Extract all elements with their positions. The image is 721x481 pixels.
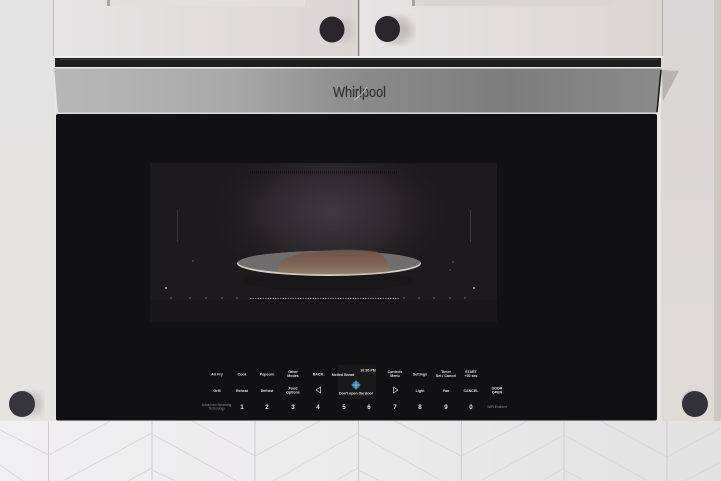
top row buttons: Other [288,370,298,374]
top row buttons: Menu [390,374,400,378]
number row: 3 [291,404,295,411]
side knob: right [682,391,708,417]
top row buttons: +30 sec [464,374,478,378]
middle row buttons: Don't open the door [339,392,374,396]
top row buttons: Settings [413,372,427,376]
middle row buttons: Fan [443,389,449,393]
middle row buttons: OPEN [492,390,502,394]
upper cabinet doors [53,0,663,58]
display screen [338,365,376,399]
top row buttons: 10:30 PM [360,368,376,372]
feature label: steaming: Technology [208,406,225,410]
plate [237,251,421,291]
wall panel: left [0,0,54,423]
oven cavity window [150,163,497,300]
top row buttons: Melted Bread [332,373,354,377]
middle row buttons: Defrost [261,389,274,393]
middle row buttons: DOOR [492,386,503,390]
feature label: wifi: WiFi Enabled [487,405,507,409]
number row: 5 [342,404,346,411]
feature label: steaming [202,403,231,410]
logo: Whirlpool: Whirlpool [333,84,386,101]
number row: 9 [444,404,448,411]
cabinet knob: left [320,16,344,42]
microwave vent gap [55,58,661,69]
left arrow [316,387,320,393]
middle row buttons: Reheat [236,389,249,393]
number row: 6 [367,404,371,411]
number row: 0 [469,404,473,411]
middle row buttons: Light [416,389,425,393]
food on plate [278,250,390,274]
backsplash tiles [0,421,721,481]
top row buttons: Air Fry [211,372,223,376]
number row: 2 [265,404,269,411]
steel trim shadow [662,70,679,101]
number row [240,404,473,411]
top row buttons [211,368,478,378]
number row: 8 [418,404,422,411]
number row: 4 [316,404,320,411]
middle row buttons [213,386,503,396]
rack dots and rails [165,210,475,299]
top row buttons: Cook [238,372,246,376]
microwave steel trim [54,67,662,114]
cabinet knob: right [375,16,400,42]
feature label: steaming: Advanced Steaming [202,403,231,407]
top row buttons: Controls [388,370,402,374]
middle row buttons: Grill [213,389,221,393]
middle row buttons: Options [286,390,300,394]
right arrow [394,387,398,393]
control panel [202,365,507,411]
top row buttons: Set / Cancel [436,374,456,378]
top row buttons: Modes [287,374,299,378]
top row buttons: BACK [313,372,324,376]
middle row buttons: Food [289,386,297,390]
middle row buttons: CANCEL [464,389,479,393]
screen icon [352,380,360,390]
side knob: left [9,391,43,417]
top row buttons: START [465,370,478,374]
wall panel: right [661,0,721,423]
microwave body [56,114,657,420]
top row buttons: Popcorn [260,372,274,376]
number row: 1 [240,404,244,411]
number row: 7 [393,404,397,411]
top row buttons: Timer [441,370,451,374]
